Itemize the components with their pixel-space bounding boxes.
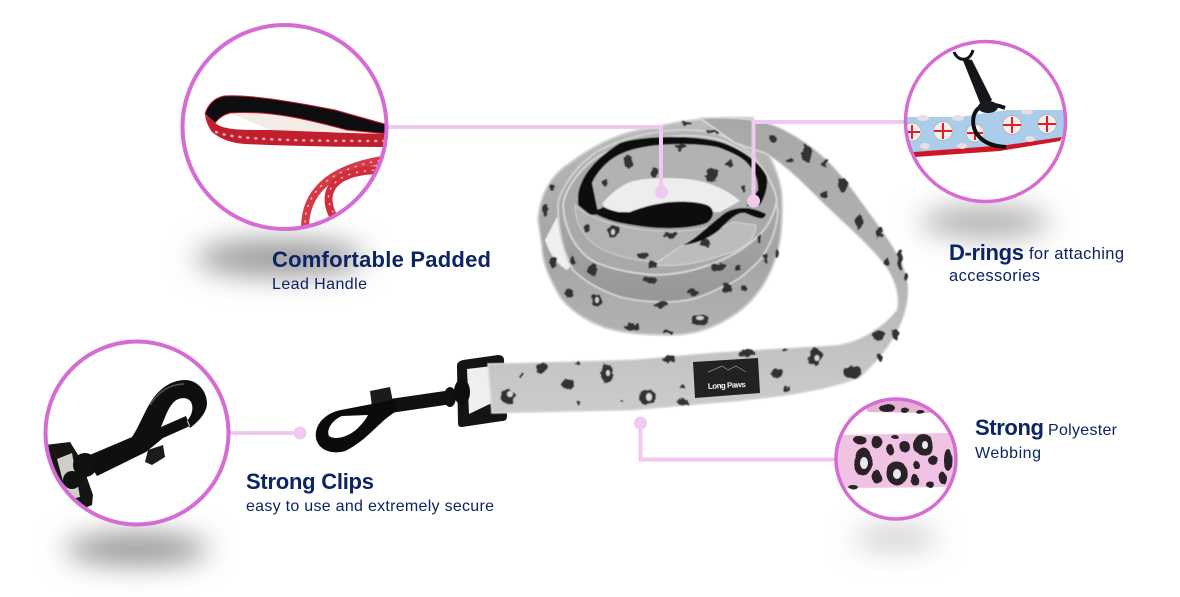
tail spots <box>501 135 908 406</box>
circle: D-ring closeup <box>900 42 1070 202</box>
white centre <box>602 178 740 212</box>
coiled leash <box>538 117 782 335</box>
text: strong clips: easy to use and extremely secure <box>246 498 494 515</box>
text: strong webbing: Polyester <box>1048 422 1118 439</box>
text: D-rings <box>949 240 1124 285</box>
circle: padded handle closeup <box>182 25 388 229</box>
leash tail webbing <box>488 118 908 413</box>
text: strong clips: Strong Clips <box>246 469 374 494</box>
text: D-rings: D-rings <box>949 240 1024 265</box>
shadows beneath circles <box>65 208 1050 564</box>
connector: webbing callout <box>634 416 836 460</box>
connector: D-ring callout <box>747 122 905 208</box>
text: strong clips <box>246 469 494 515</box>
text: comfortable padded: Comfortable Padded <box>272 247 491 272</box>
text: D-rings: accessories <box>949 267 1040 285</box>
inner webbing band <box>592 144 758 212</box>
logo label: Long Paws <box>708 380 747 391</box>
connector: handle callout <box>388 127 668 198</box>
black padding ring <box>578 137 767 215</box>
metal swivel clip <box>316 355 507 452</box>
padded handle <box>580 200 713 228</box>
text: D-rings: for attaching <box>1029 245 1124 263</box>
text: comfortable padded: Lead Handle <box>272 276 367 293</box>
circle: polyester webbing closeup <box>830 398 960 519</box>
coil spots <box>542 121 779 334</box>
stitched strap <box>657 222 756 266</box>
text: strong webbing: Strong <box>975 415 1044 440</box>
logo label <box>693 358 760 398</box>
text: strong webbing <box>975 415 1118 462</box>
text: comfortable padded <box>272 247 491 293</box>
front band <box>575 205 713 262</box>
text: strong webbing: Webbing <box>975 445 1041 462</box>
circle: strong clip closeup <box>45 342 228 524</box>
leash product photo <box>316 117 908 452</box>
connector: clip callout <box>230 426 306 440</box>
